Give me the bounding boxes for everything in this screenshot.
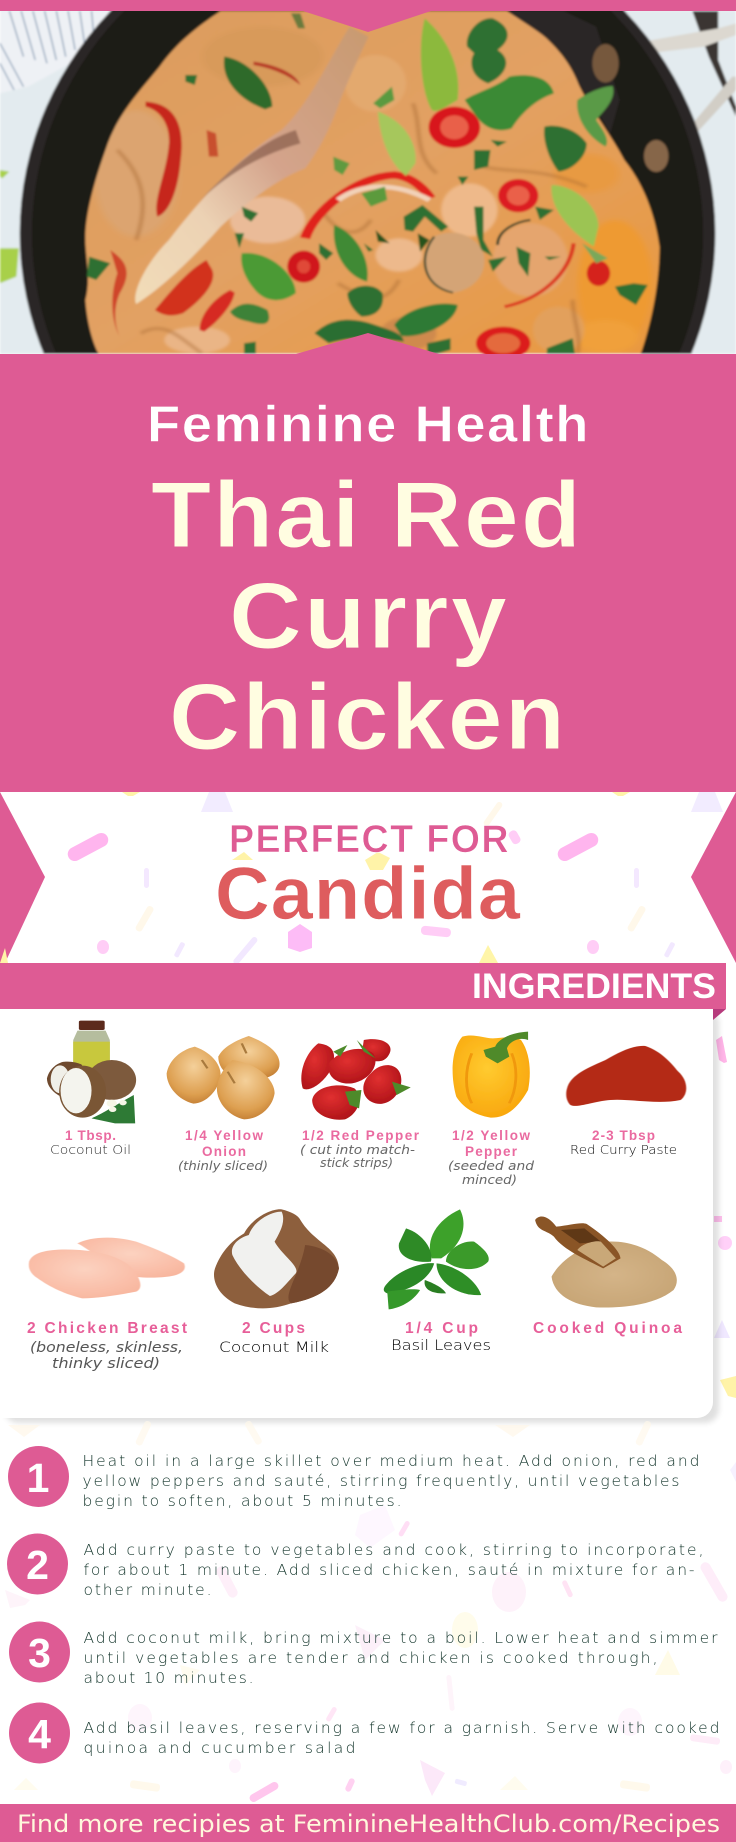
pan handle right	[692, 11, 736, 117]
step 3	[9, 1622, 718, 1687]
number badge 1: 1	[27, 1455, 49, 1501]
right ribbon notch	[691, 792, 736, 963]
ingredient: yellow pepper: Pepper	[465, 1144, 518, 1159]
step 1 text: Heat oil in a large skillet over medium heat. Add onion, red and	[82, 1452, 700, 1470]
title panel	[0, 333, 736, 792]
number badge 2: 2	[26, 1542, 49, 1588]
number badge 3	[9, 1622, 70, 1682]
number badge 2	[7, 1534, 68, 1594]
number badge 4	[9, 1702, 70, 1764]
step 1	[8, 1446, 700, 1510]
step 1 text	[82, 1452, 700, 1510]
label: 1/2 Red Pepper	[302, 1128, 420, 1143]
hero photo: curry in skillet	[0, 11, 736, 354]
ingredient: chicken breast: (boneless, skinless,	[30, 1340, 183, 1356]
towel	[0, 11, 120, 93]
label: Cooked Quinoa	[533, 1320, 682, 1337]
ingredient: cooked quinoa	[533, 1217, 682, 1337]
ingredient: coconut oil: Coconut Oil	[50, 1142, 131, 1157]
ingredient: chicken breast	[27, 1238, 187, 1372]
ingredient: yellow pepper: minced)	[462, 1172, 517, 1187]
label: 2 Cups	[242, 1320, 305, 1337]
footer text: Find more recipies at FeminineHealthClub.com/Recipes	[17, 1810, 720, 1838]
icon: cracked coconut	[214, 1209, 339, 1308]
banner: perfect for candida	[0, 792, 736, 966]
label: 1 Tbsp.	[65, 1128, 116, 1143]
confetti behind steps	[5, 1420, 736, 1803]
label: 1/4 Yellow	[185, 1128, 263, 1143]
ingredient: yellow onion: (thinly sliced)	[178, 1158, 268, 1173]
ingredient: red curry paste: Red Curry Paste	[570, 1142, 677, 1157]
step 2 text: Add curry paste to vegetables and cook, stirring to incorporate,	[84, 1541, 704, 1559]
step 3 text: until vegetables are tender and chicken is cooked through,	[84, 1649, 658, 1667]
ingredients header band	[0, 963, 726, 1020]
title line: Curry: Curry	[229, 563, 509, 668]
ingredient: red pepper	[300, 1039, 420, 1170]
step 4 text: quinoa and cucumber salad	[84, 1739, 356, 1757]
ingredient: coconut milk: Coconut Milk	[219, 1340, 329, 1356]
step 4 text: Add basil leaves, reserving a few for a garnish. Serve with cooked	[84, 1719, 720, 1737]
step 2 text: for about 1 minute. Add sliced chicken, sauté in mixture for an-	[84, 1561, 694, 1579]
left ribbon notch	[0, 792, 45, 963]
banner confetti	[65, 792, 723, 966]
ingredient: red pepper: ( cut into match-	[300, 1142, 416, 1157]
footer bar	[0, 1804, 736, 1842]
text: perfect for: PERFECT FOR	[229, 818, 510, 861]
step 3 text: Add coconut milk, bring mixture to a boil. Lower heat and simmer	[84, 1629, 718, 1647]
red and white pepper arc	[305, 175, 431, 238]
subtitle: Feminine Health: Feminine Health	[147, 396, 590, 453]
ingredient: basil leaves	[384, 1209, 491, 1354]
ingredients heading: INGREDIENTS	[472, 967, 716, 1006]
step 3 text	[84, 1629, 718, 1687]
step 3 text: about 10 minutes.	[84, 1669, 254, 1687]
step 2 text: other minute.	[84, 1581, 212, 1599]
icon: oil bottle and coconut	[47, 1021, 136, 1123]
ingredient: yellow pepper: (seeded and	[448, 1158, 534, 1173]
zucchini slices	[425, 233, 484, 293]
ingredient: basil leaves: Basil Leaves	[391, 1338, 491, 1354]
skillet	[20, 0, 715, 563]
step 4	[9, 1702, 720, 1764]
step 2 text	[84, 1541, 704, 1599]
side herbs	[0, 248, 19, 283]
label: 1/2 Yellow	[452, 1128, 530, 1143]
step 2	[7, 1534, 704, 1599]
curry sauce	[85, 11, 660, 354]
step 1 text: yellow peppers and sauté, stirring frequently, until vegetables	[82, 1472, 680, 1490]
icon: quinoa with wooden scoop	[535, 1217, 677, 1307]
icon: onions	[167, 1036, 280, 1119]
ingredient: coconut oil	[47, 1021, 136, 1157]
ingredient: red curry paste	[566, 1046, 686, 1157]
title line: Chicken: Chicken	[169, 664, 567, 769]
icon: chicken breasts	[29, 1238, 185, 1298]
label: 2 Chicken Breast	[27, 1320, 187, 1337]
number badge 4: 4	[28, 1711, 51, 1757]
icon: curry paste pile	[566, 1046, 686, 1106]
ingredients card	[0, 963, 726, 1423]
cilantro clusters	[87, 13, 648, 354]
ingredient: red pepper: stick strips)	[320, 1155, 393, 1170]
icon: red peppers	[301, 1039, 411, 1120]
number badge 1	[8, 1446, 69, 1507]
chili rings	[429, 107, 480, 148]
step 1 text: begin to soften, about 5 minutes.	[82, 1492, 402, 1510]
icon: basil	[384, 1209, 489, 1309]
background confetti right of card	[714, 1036, 736, 1398]
ingredient: yellow pepper	[448, 1032, 534, 1187]
ingredient: chicken breast: thinky sliced)	[52, 1356, 160, 1372]
icon: yellow pepper	[453, 1032, 530, 1118]
label: 2-3 Tbsp	[592, 1128, 655, 1143]
ingredient: coconut milk	[214, 1209, 339, 1356]
dark pan patch	[507, 11, 620, 133]
basil leaves	[421, 18, 458, 111]
label: 1/4 Cup	[405, 1320, 478, 1337]
wooden spoon	[135, 27, 368, 304]
number badge 3: 3	[28, 1630, 51, 1676]
red pepper strips	[146, 102, 182, 217]
rivets	[592, 44, 619, 83]
text: candida: Candida	[215, 852, 521, 935]
ingredient: yellow onion	[167, 1036, 280, 1173]
step 4 text	[84, 1719, 720, 1757]
ingredient: yellow onion: Onion	[202, 1144, 246, 1159]
title line: Thai Red: Thai Red	[151, 462, 583, 567]
top pink band with notch	[0, 0, 736, 32]
